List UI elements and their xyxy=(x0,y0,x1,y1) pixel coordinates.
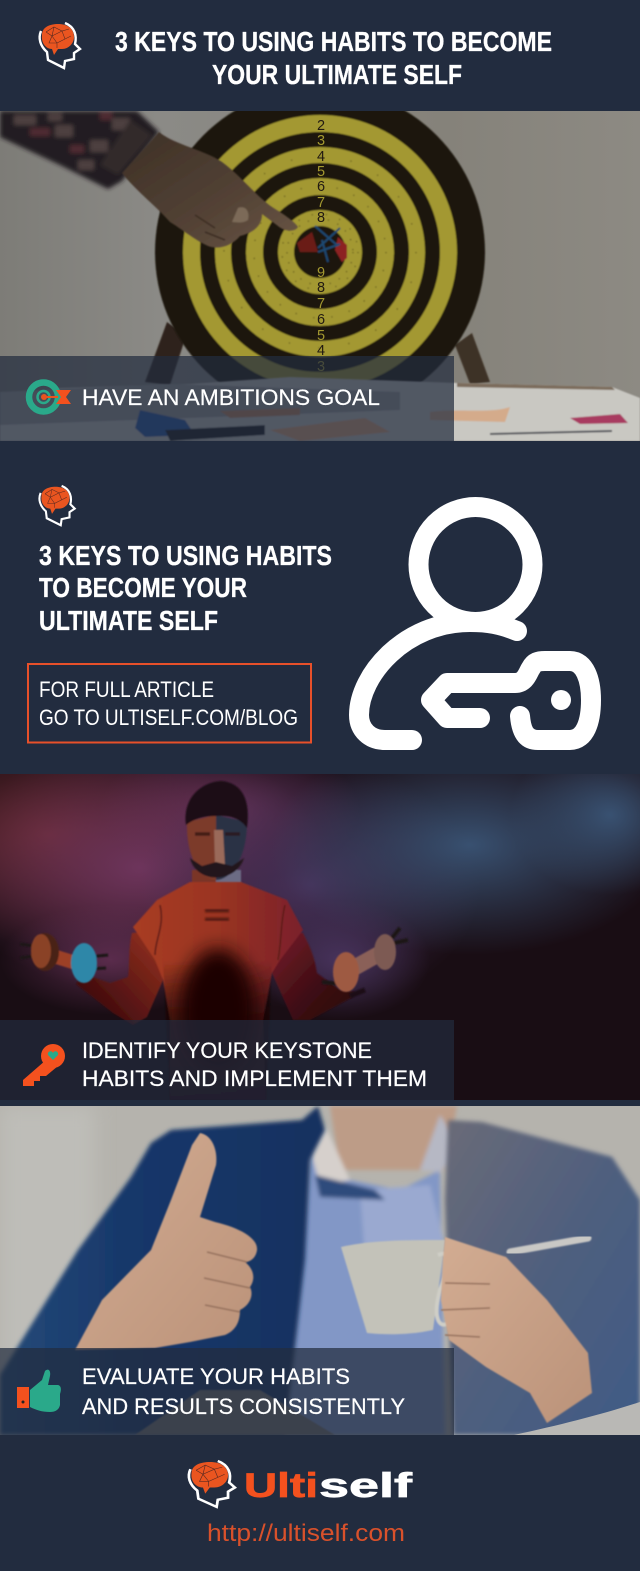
target numbers: 8 xyxy=(317,280,325,296)
photo: man arms xyxy=(76,930,355,1025)
callout: read full article: FOR FULL ARTICLE xyxy=(39,677,214,702)
brand wordmark: Ulti xyxy=(244,1467,318,1505)
target with rings xyxy=(154,111,486,382)
title: 3 KEYS TO USING HABITS TO BECOME xyxy=(115,26,552,57)
target numbers: 6 xyxy=(317,312,325,328)
photo: table and papers xyxy=(0,377,640,441)
panel: middle article card xyxy=(0,441,640,774)
panel: keystone habits photo xyxy=(0,774,640,1100)
banner text: AND RESULTS CONSISTENTLY xyxy=(82,1394,405,1419)
photo: man neck and head xyxy=(184,780,249,883)
footer panel xyxy=(0,1435,640,1571)
photo: hand holding cup xyxy=(441,1237,592,1423)
target numbers: 9 xyxy=(317,265,325,281)
title xyxy=(115,26,552,90)
target numbers: 3 xyxy=(317,133,325,149)
photo: thumbs up hand xyxy=(75,1133,257,1350)
target numbers: 4 xyxy=(317,343,325,359)
photo: coffee cup xyxy=(341,1240,450,1334)
target numbers: 5 xyxy=(317,164,325,180)
website url: http://ultiself.com xyxy=(207,1520,405,1547)
photo: pocket square xyxy=(510,1238,588,1252)
brand wordmark: self xyxy=(319,1467,413,1505)
brand wordmark xyxy=(244,1467,413,1505)
photo: man torso xyxy=(132,881,304,1048)
icon: brain head logo small xyxy=(39,486,75,525)
photo: dumbbells xyxy=(20,928,408,996)
callout: read full article: GO TO ULTISELF.COM/BLOG xyxy=(39,705,298,730)
photo: left jacket xyxy=(0,1106,325,1435)
photo: right jacket xyxy=(445,1120,640,1435)
target numbers: 3 xyxy=(317,359,325,375)
target numbers: 8 xyxy=(317,210,325,226)
banner text xyxy=(84,1042,426,1086)
photo: dark smoky background xyxy=(0,774,640,1100)
target numbers: 6 xyxy=(317,179,325,195)
target numbers: 7 xyxy=(317,296,325,312)
icon: brain head logo footer xyxy=(189,1461,235,1507)
icon: thumbs up xyxy=(17,1370,61,1412)
photo: light background xyxy=(0,1106,640,1435)
photo: neck and shirt xyxy=(285,1106,462,1435)
banner: evaluate habits xyxy=(0,1348,454,1435)
banner: have an ambitious goal xyxy=(0,356,454,441)
target numbers: 7 xyxy=(317,195,325,211)
photo: target stand legs xyxy=(145,322,490,385)
target numbers: 5 xyxy=(317,328,325,344)
photo: plaid sleeve xyxy=(0,111,159,189)
banner text xyxy=(82,1368,405,1414)
heading xyxy=(39,540,332,636)
icon: orange key with heart xyxy=(23,1044,65,1086)
target numbers: 4 xyxy=(317,149,325,165)
icon: brain head logo xyxy=(40,23,80,68)
panel: evaluate photo xyxy=(0,1106,640,1435)
callout: read full article xyxy=(28,664,311,742)
target numbers: 2 xyxy=(317,118,325,134)
title: YOUR ULTIMATE SELF xyxy=(212,59,462,90)
photo: pointing hand xyxy=(122,132,298,248)
photo: wall background xyxy=(0,111,640,441)
banner text: EVALUATE YOUR HABITS xyxy=(82,1364,350,1389)
target numbers xyxy=(317,118,325,375)
banner: keystone habits xyxy=(0,1020,454,1100)
photo: trousers hint xyxy=(135,1390,335,1435)
photo: man with dumbbells xyxy=(76,780,354,1038)
banner text: HAVE AN AMBITIONS GOAL xyxy=(82,385,380,410)
heading: ULTIMATE SELF xyxy=(39,605,218,636)
banner text: IDENTIFY YOUR KEYSTONE xyxy=(82,1038,372,1063)
header panel xyxy=(0,0,640,111)
banner text: HABITS AND IMPLEMENT THEM xyxy=(82,1066,427,1091)
icon: target and arrow xyxy=(29,382,71,412)
heading: TO BECOME YOUR xyxy=(39,572,247,603)
panel: goal photo xyxy=(0,87,640,441)
icon: person with key xyxy=(359,507,591,740)
photo: bottom right corner xyxy=(514,1402,640,1435)
heading: 3 KEYS TO USING HABITS xyxy=(39,540,332,571)
photo: shadow on torso xyxy=(180,948,256,1072)
